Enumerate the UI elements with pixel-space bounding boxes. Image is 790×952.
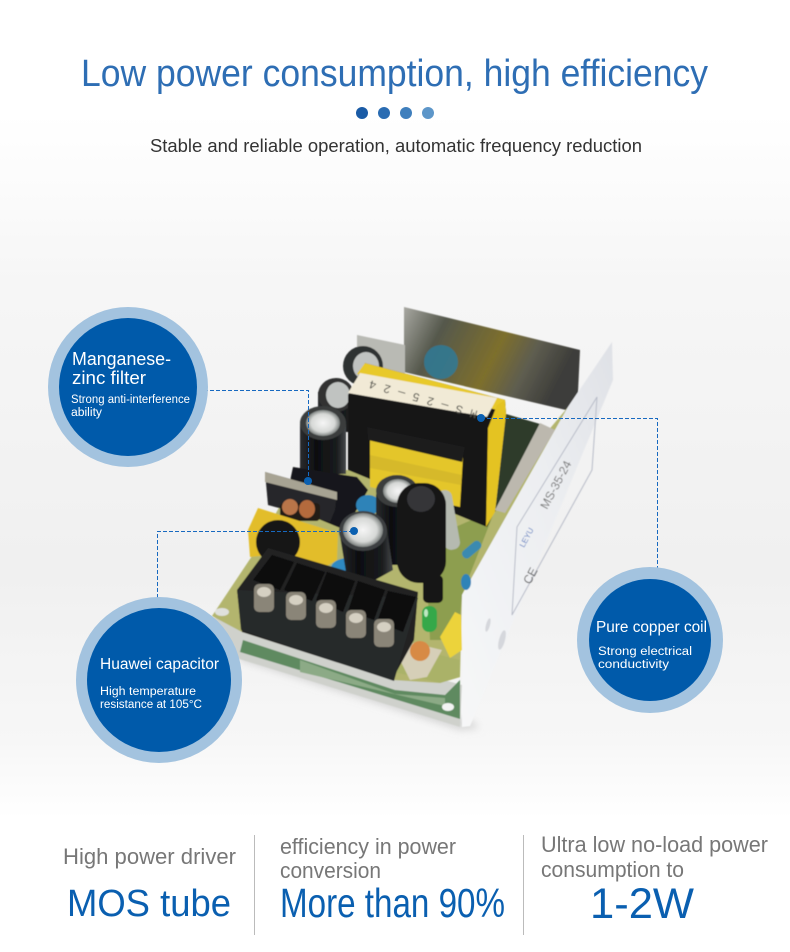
side wall [462, 342, 613, 727]
product photo: power supply module: LEYU [518, 526, 536, 549]
callout: manganese-zinc filter connector [198, 390, 312, 485]
stat: 1-2W [541, 832, 768, 928]
description: anti-interference: Strong anti-interference [71, 394, 190, 406]
transformer [348, 363, 506, 527]
green led [422, 606, 437, 632]
dark pcb area [495, 414, 540, 512]
product photo: power supply module: CE [520, 565, 540, 586]
callout: capacitor connector [158, 527, 358, 610]
heading: manganese-zinc filter: Manganese- [72, 348, 171, 369]
terminal block [237, 548, 418, 680]
mounting hole [215, 608, 229, 616]
resistors [460, 539, 483, 560]
description: electrical conductivity: conductivity [598, 659, 669, 671]
stat: more than 90%: efficiency in power [280, 834, 456, 859]
heading: huawei capacitor: Huawei capacitor [100, 656, 219, 673]
description: high temperature: resistance at 105°C [100, 699, 202, 711]
back capacitors [343, 346, 383, 386]
product photo: power supply module: MS—25—24 [368, 376, 479, 421]
pcb [212, 407, 568, 683]
panel: manganese-zinc filter [48, 307, 208, 467]
subtitle: Stable and reliable operation, automatic frequency reduction [150, 135, 642, 156]
product photo: power supply module [210, 307, 613, 730]
description: electrical conductivity: Strong electrical [598, 646, 692, 658]
heading: pure copper coil: Pure copper coil [596, 619, 707, 636]
decorative dots row [356, 107, 434, 119]
stat: more than 90%: More than 90% [280, 880, 505, 926]
stat: more than 90% [280, 834, 505, 926]
green reflection band [240, 640, 460, 719]
common mode choke [285, 467, 368, 530]
divider [254, 835, 255, 935]
title: Low power consumption, high efficiency [81, 53, 708, 95]
blue capacitors [356, 495, 380, 515]
stat: MOS tube: MOS tube [67, 883, 231, 925]
back plate [404, 307, 580, 410]
panel: huawei capacitor [76, 597, 242, 763]
yellow x capacitor [248, 508, 338, 570]
stat: MOS tube: High power driver [63, 844, 236, 869]
trimmer [400, 643, 442, 680]
black choke [397, 483, 446, 583]
yellow small capacitor [440, 612, 462, 658]
stat: 1-2W: 1-2W [590, 880, 694, 928]
ground shadow [240, 650, 480, 730]
silver tray [210, 617, 462, 727]
stat: MOS tube [63, 844, 236, 925]
description: high temperature: High temperature [100, 686, 196, 698]
heat sink strip [495, 423, 555, 513]
large capacitor rear [376, 490, 418, 565]
description: anti-interference: ability [71, 407, 102, 419]
heading: manganese-zinc filter: zinc filter [72, 367, 146, 388]
wall holes [484, 618, 492, 632]
divider [523, 835, 524, 935]
wall label: MS-35-24 [537, 458, 575, 511]
panel: pure copper coil [577, 567, 723, 713]
front capacitor [339, 530, 393, 580]
stat: 1-2W: consumption to [541, 857, 684, 882]
stat: more than 90%: conversion [280, 858, 381, 883]
callout: copper coil connector [477, 414, 658, 578]
black thermistor [256, 520, 300, 564]
stat: 1-2W: Ultra low no-load power [541, 832, 768, 857]
